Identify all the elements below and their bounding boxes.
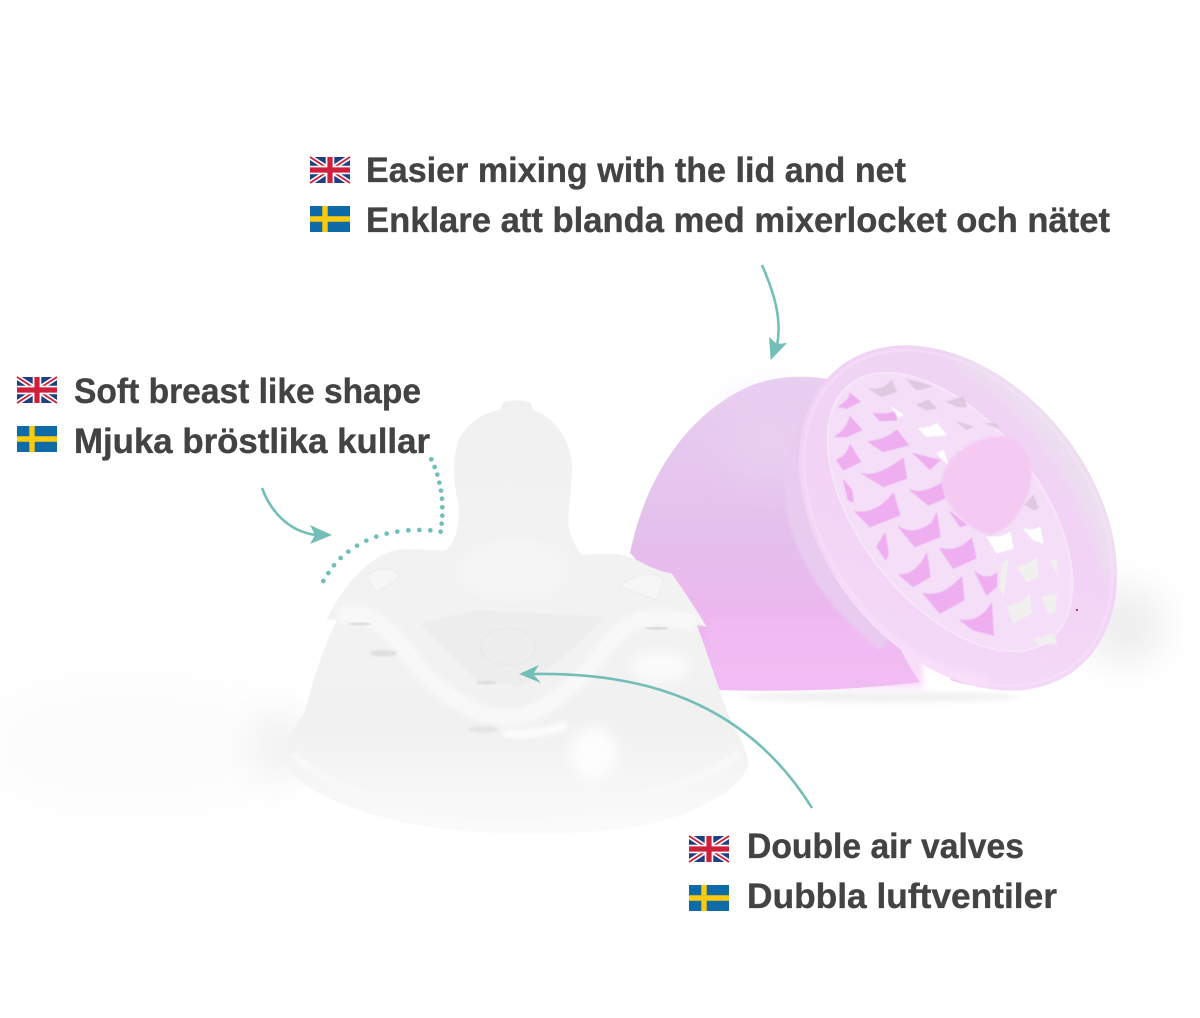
inner net <box>779 329 1121 695</box>
arrow: to air valves <box>519 665 812 808</box>
arrow: to breast shape <box>262 488 332 544</box>
flag: UK <box>17 377 57 403</box>
English caption: Easier mixing with the lid and net <box>366 151 906 190</box>
flange highlight band <box>337 614 697 718</box>
flag: Sweden <box>17 426 57 452</box>
English caption: Soft breast like shape <box>74 372 421 411</box>
product: clear silicone nipple <box>282 400 748 834</box>
net holes <box>835 380 1057 645</box>
Swedish caption: Enklare att blanda med mixerlocket och nätet <box>366 201 1110 240</box>
tiny speck <box>1076 609 1078 611</box>
flag: Sweden <box>689 885 729 911</box>
flag: UK <box>689 836 729 862</box>
shoulder and stem shading <box>457 540 570 600</box>
lid collar <box>785 378 950 650</box>
text block: top label <box>310 151 1110 240</box>
bottom lip of the lid <box>950 612 1105 687</box>
English caption: Double air valves <box>747 827 1024 866</box>
text block: left label <box>17 372 430 461</box>
pink dome <box>630 377 920 691</box>
product: pink mixer lid with net <box>630 284 1183 752</box>
inner dip <box>420 610 603 687</box>
text block: bottom label <box>689 827 1057 916</box>
Swedish caption: Dubbla luftventiler <box>747 877 1057 916</box>
dotted contour line <box>321 457 445 583</box>
flag: UK <box>310 157 350 183</box>
central blob <box>942 437 1031 535</box>
soft shadows <box>370 650 397 657</box>
arrow: to mixer lid <box>762 265 787 360</box>
flag: Sweden <box>310 206 350 232</box>
floor shadows <box>0 585 1165 805</box>
Swedish caption: Mjuka bröstlika kullar <box>74 422 430 461</box>
base rim <box>293 753 740 815</box>
highlight <box>570 727 617 780</box>
outer ring of the lid <box>733 284 1183 752</box>
